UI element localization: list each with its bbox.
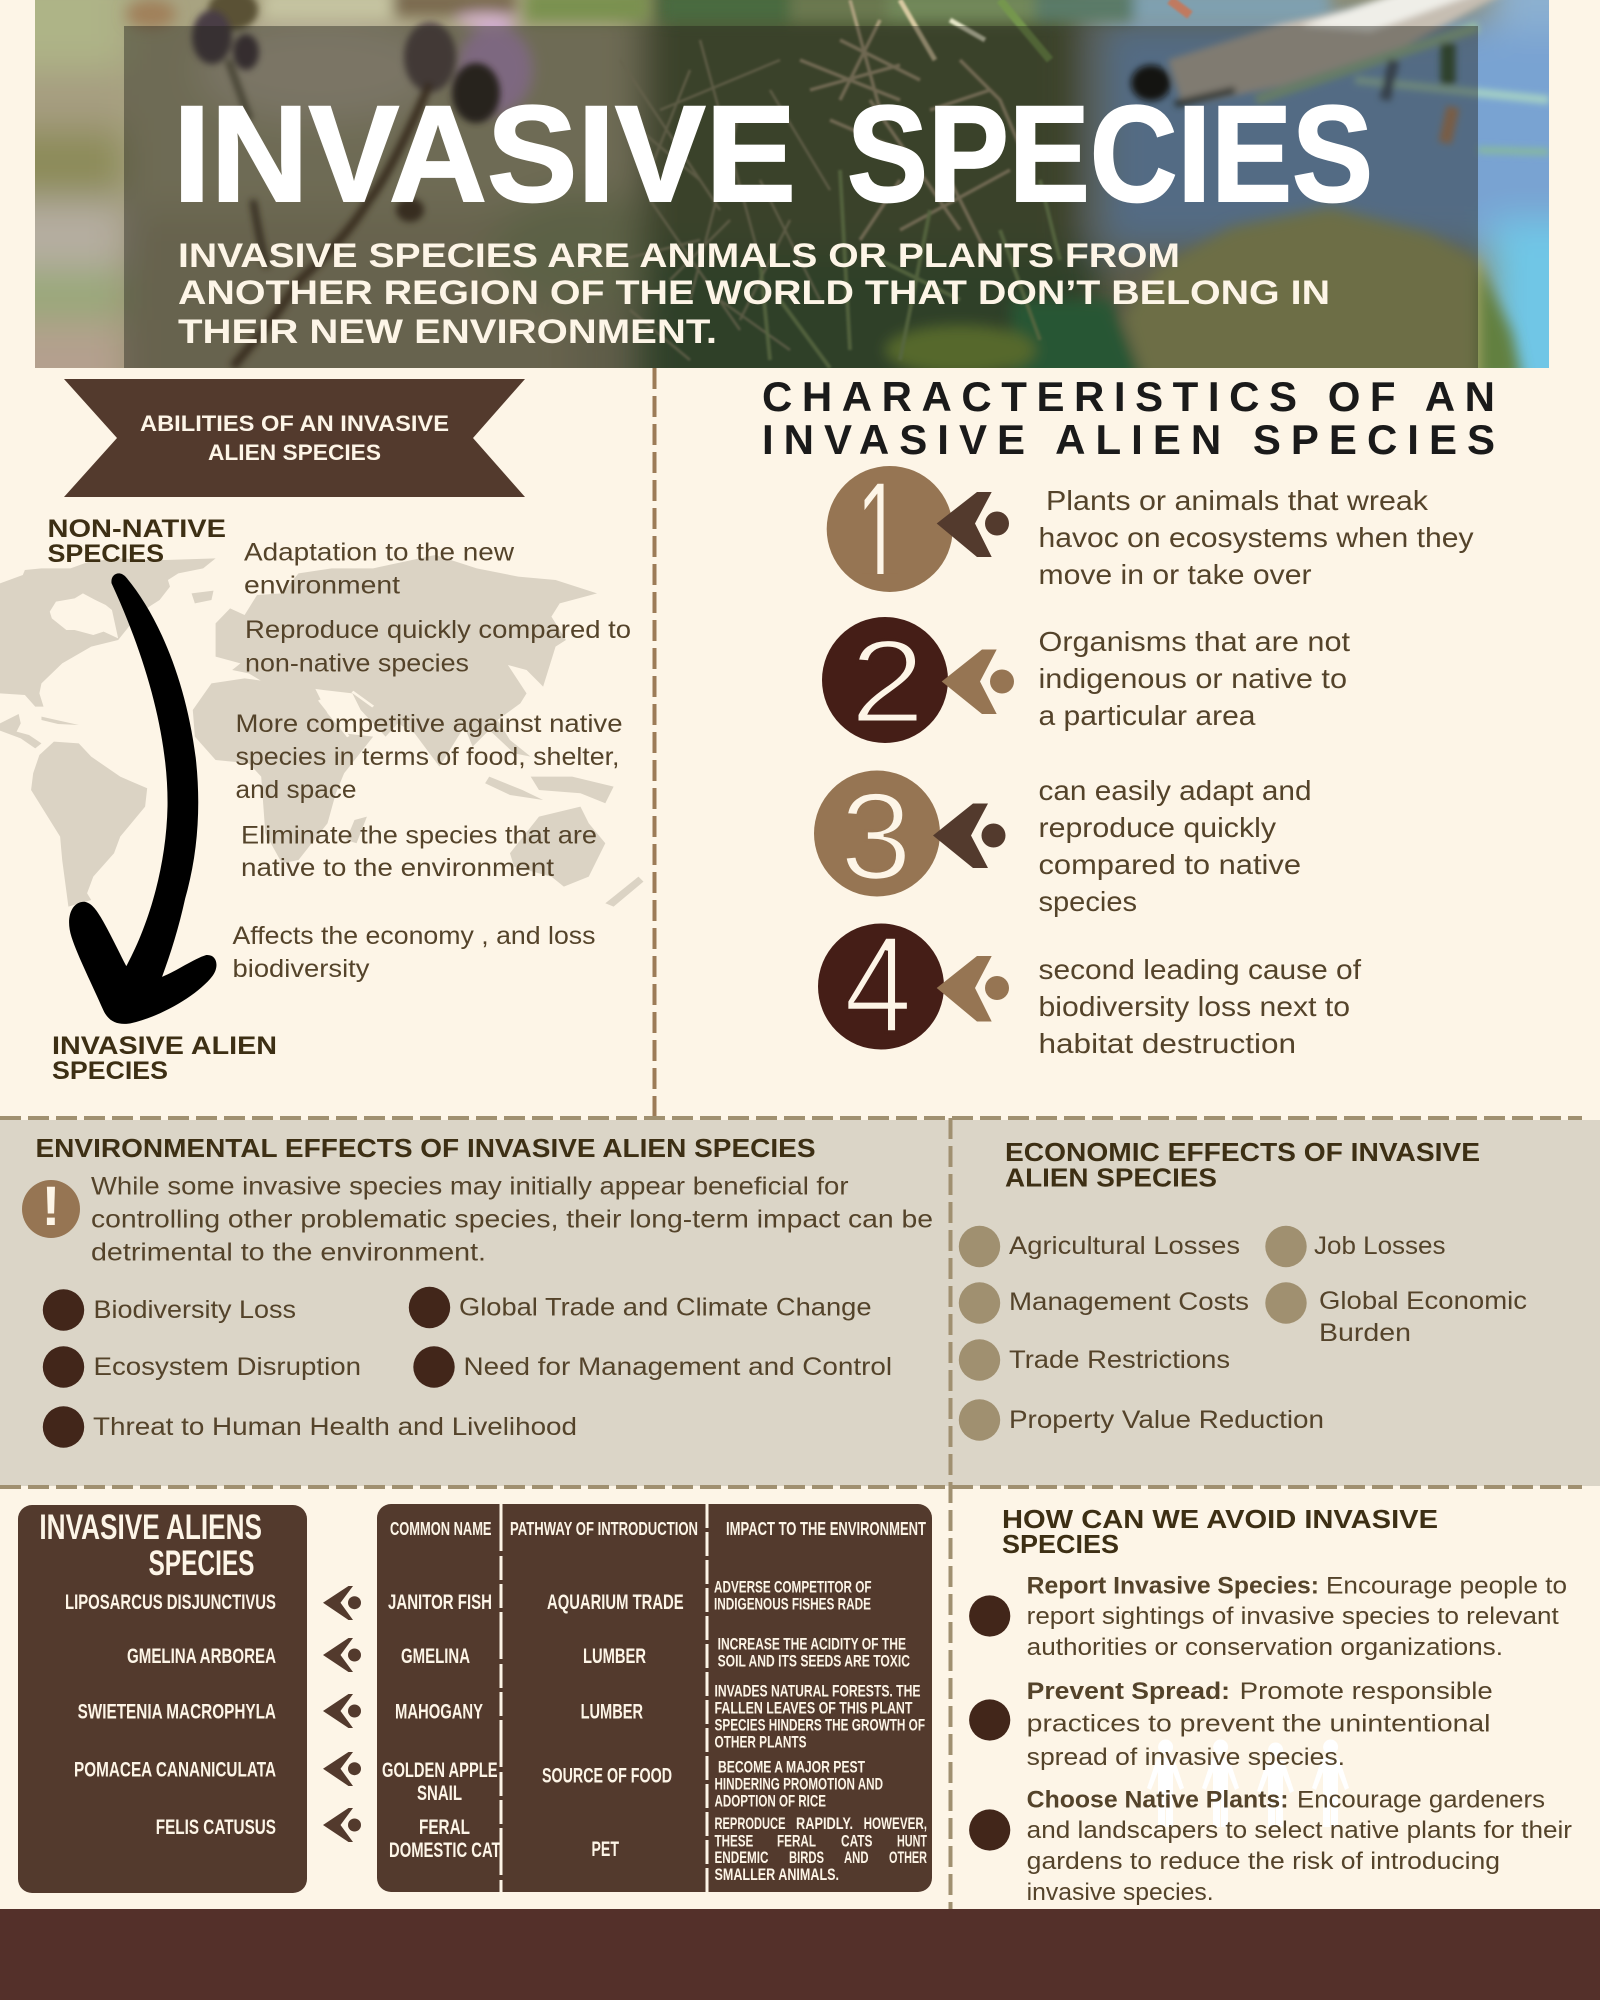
panel: how can we avoid invasive species [969,1504,1572,1906]
item 2 text [1038,626,1350,731]
text: eliminate: native to the environment [241,854,554,882]
heading [1002,1504,1438,1559]
table header: PATHWAY OF INTRODUCTION [510,1519,698,1539]
arrow icons between list and table [323,1586,361,1842]
tip: prevent spread: practices to prevent the unintentional [1027,1711,1490,1738]
text: eliminate: Eliminate the species that are [241,822,597,850]
bullet: job losses [1265,1226,1446,1267]
tip: prevent spread: Prevent Spread: [1027,1678,1230,1705]
heading: INVASIVE ALIEN SPECIES [762,416,1495,463]
decorative people silhouettes [1147,1740,1349,1827]
item 4 text: habitat destruction [1038,1028,1296,1059]
text: competitive: and space [236,776,356,804]
panel: species table [377,1504,932,1892]
column: common name: FERAL [419,1816,470,1839]
title: INVASIVE [173,78,796,231]
item 4 badge [818,908,1009,1062]
column: impact [714,1579,927,1884]
text: reproduce: Reproduce quickly compared to [245,616,631,644]
bullet: global economic burden: Burden [1319,1319,1411,1347]
item 1 text: Plants or animals that wreak [1046,485,1429,516]
column: common name: GMELINA [401,1645,470,1668]
tip: choose native plants: gardens to reduce the risk of introducing [1027,1848,1500,1875]
heading: SPECIES [1002,1529,1119,1559]
item 4 text [1038,954,1361,1059]
item 1 badge [826,466,1009,592]
column: impact: SMALLER ANIMALS. [714,1866,839,1884]
item 4 badge: 4 [844,908,912,1062]
heading [1005,1137,1480,1192]
column: common name: JANITOR FISH [388,1591,492,1614]
icon: exclamation [22,1174,80,1238]
bullet: ecosystem disruption [43,1346,361,1388]
subtitle text block: ANOTHER REGION OF THE WORLD THAT DON’T BELONG IN [178,274,1330,312]
item 1 text: move in or take over [1038,559,1312,590]
bullet: trade restrictions [959,1339,1230,1381]
panel: economic effects [959,1137,1527,1441]
item 1 text: havoc on ecosystems when they [1038,522,1474,553]
column: impact: ADOPTION OF RICE [714,1793,826,1811]
tip: prevent spread: spread of invasive species. [1027,1744,1345,1771]
column: impact: OTHER [889,1849,927,1867]
bullet: biodiversity loss: Biodiversity Loss [94,1296,296,1324]
tip: choose native plants: Choose Native Plants: [1027,1787,1288,1814]
tip: report invasive species: Report Invasive Species: [1027,1573,1319,1600]
bullet: human health: Threat to Human Health and Livelihood [93,1413,577,1441]
subtitle text block [178,237,1330,351]
item 3 text [1038,775,1312,917]
bullet: global trade [409,1287,872,1328]
panel: abilities of an invasive alien species [48,379,631,1085]
arrow: non-native to invasive [69,573,216,1024]
tip: choose native plants: Encourage gardeners [1297,1787,1545,1814]
bullet: management and control [413,1346,892,1388]
panel: characteristics of an invasive alien species [762,373,1495,1062]
bullet: trade restrictions: Trade Restrictions [1009,1346,1230,1374]
scientific names: GMELINA ARBOREA [127,1645,276,1668]
intro paragraph: detrimental to the environment. [91,1238,486,1266]
column: pathway: LUMBER [583,1645,646,1668]
scientific names [65,1591,276,1839]
text: competitive [236,710,622,804]
tip: report invasive species: authorities or conservation organizations. [1027,1634,1503,1661]
scientific names: FELIS CATUSUS [156,1816,276,1839]
column: impact: REPRODUCE [714,1815,786,1833]
tip: choose native plants: and landscapers to select native plants for their [1027,1817,1572,1844]
column: impact: HOWEVER, [864,1815,927,1833]
item 3 text: species [1038,886,1137,917]
label: non-native species: NON-NATIVE [48,515,226,543]
list heading: SPECIES [148,1544,254,1583]
ribbon heading [64,379,525,497]
bottom footer band [0,1909,1600,2000]
intro paragraph: While some invasive species may initially appear beneficial for [91,1172,848,1200]
column: impact: INVADES NATURAL FORESTS. THE [714,1683,920,1701]
tip: report invasive species: report sightings of invasive species to relevant [1027,1603,1559,1630]
label: non-native species [48,515,226,568]
column: impact: SOIL AND ITS SEEDS ARE TOXIC [718,1653,910,1671]
bullet: human health [43,1406,577,1448]
column: impact: ADVERSE COMPETITOR OF [714,1579,872,1597]
table header: IMPACT TO THE ENVIRONMENT [726,1519,926,1539]
dark overlay panel [124,26,1478,368]
text: competitive: species in terms of food, shelter, [236,743,620,771]
table header [390,1519,926,1539]
column: impact: OTHER PLANTS [714,1734,806,1752]
item 3 badge: 3 [840,768,912,906]
bullet: global economic burden: Global Economic [1319,1287,1527,1315]
item 2 text: Organisms that are not [1038,626,1350,657]
column: impact: FERAL [777,1832,816,1850]
column: impact: BECOME A MAJOR PEST [718,1759,865,1777]
item 3 text: can easily adapt and [1038,775,1312,806]
subtitle text block: THEIR NEW ENVIRONMENT. [178,313,717,351]
text: reproduce: non-native species [245,650,469,678]
panel: environmental effects [22,1133,933,1448]
label: invasive alien species: SPECIES [52,1057,168,1085]
item 4 text: biodiversity loss next to [1038,991,1350,1022]
item 2 badge: 2 [850,616,925,748]
icon: exclamation: ! [42,1174,60,1237]
header photo banner [35,0,1549,368]
label: invasive alien species [52,1032,277,1085]
tip: prevent spread: Promote responsible [1240,1678,1493,1705]
ribbon heading: ABILITIES OF AN INVASIVE [140,411,449,436]
tip: choose native plants [969,1787,1572,1906]
column: common name: DOMESTIC CAT [389,1839,501,1862]
heading: ENVIRONMENTAL EFFECTS OF INVASIVE ALIEN SPECIES [36,1133,816,1163]
list heading [39,1508,262,1583]
column: impact: HUNT [897,1832,927,1850]
ribbon heading: ALIEN SPECIES [208,440,381,465]
text: adaptation: Adaptation to the new [244,538,515,566]
panel: species list [18,1505,307,1893]
intro paragraph [91,1172,933,1266]
text: reproduce [245,616,631,678]
bullet: ecosystem disruption: Ecosystem Disruption [94,1353,361,1381]
item 2 text: indigenous or native to [1038,663,1347,694]
item 3 text: compared to native [1038,849,1301,880]
heading [762,373,1495,463]
column: pathway [542,1591,684,1861]
column: impact: SPECIES HINDERS THE GROWTH OF [714,1717,925,1735]
heading: ALIEN SPECIES [1005,1162,1217,1192]
column: impact: THESE [714,1832,753,1850]
beige effects band [0,1120,1600,1486]
scientific names: SWIETENIA MACROPHYLA [78,1701,276,1724]
list heading: INVASIVE ALIENS [39,1508,262,1547]
tip: prevent spread [969,1678,1493,1771]
column: pathway: LUMBER [581,1701,643,1724]
text: economy: biodiversity [232,955,370,983]
text: competitive: More competitive against native [236,710,622,738]
bullet: global trade: Global Trade and Climate Change [459,1294,872,1322]
bullet: management costs: Management Costs [1009,1288,1249,1316]
column: common name: GOLDEN APPLE [382,1759,498,1782]
item 2 text: a particular area [1038,700,1256,731]
world map background [0,555,643,907]
table header: COMMON NAME [390,1519,492,1539]
column: impact: CATS [841,1832,872,1850]
column: impact: BIRDS [789,1849,824,1867]
tip: report invasive species: Encourage people to [1326,1573,1567,1600]
bullet: global economic burden [1265,1282,1527,1347]
bullet: agricultural losses: Agricultural Losses [1009,1232,1240,1260]
column: impact: RAPIDLY. [796,1815,853,1833]
column: pathway: AQUARIUM TRADE [547,1591,684,1614]
text: economy [232,922,596,983]
heading: ECONOMIC EFFECTS OF INVASIVE [1005,1137,1480,1167]
title: SPECIES [847,78,1373,231]
column: impact: HINDERING PROMOTION AND [714,1776,883,1794]
bullet: management costs [959,1282,1249,1324]
item 3 text: reproduce quickly [1038,812,1276,843]
heading: CHARACTERISTICS OF AN [762,373,1495,420]
label: non-native species: SPECIES [48,540,164,568]
bullet: job losses: Job Losses [1314,1232,1446,1260]
column: impact: INCREASE THE ACIDITY OF THE [718,1636,906,1654]
item 1 text [1038,485,1474,590]
bullet: property value reduction [959,1399,1324,1441]
intro paragraph: controlling other problematic species, their long-term impact can be [91,1206,933,1234]
label: invasive alien species: INVASIVE ALIEN [52,1032,277,1060]
tip: choose native plants: invasive species. [1027,1879,1214,1906]
column: common name [382,1591,501,1862]
bullet: agricultural losses [959,1226,1240,1267]
column: pathway: PET [592,1838,619,1861]
subtitle text block: INVASIVE SPECIES ARE ANIMALS OR PLANTS FROM [178,237,1180,275]
text: eliminate [241,822,597,882]
tip: report invasive species [969,1573,1567,1661]
column: impact: AND [844,1849,869,1867]
item 1 badge: 1 [856,450,902,618]
bullet: management and control: Need for Management and Control [464,1353,892,1381]
text: adaptation [244,538,515,600]
title [173,78,1373,231]
bullet: property value reduction: Property Value Reduction [1009,1406,1324,1434]
bullet: biodiversity loss [43,1289,296,1331]
item 3 badge [814,768,1006,906]
column: pathway: SOURCE OF FOOD [542,1765,672,1788]
column: impact: ENDEMIC [714,1849,769,1867]
column: impact: INDIGENOUS FISHES RADE [714,1596,871,1614]
item 2 badge [822,616,1014,748]
heading: HOW CAN WE AVOID INVASIVE [1002,1504,1438,1534]
column: common name: SNAIL [417,1782,462,1805]
column: impact: FALLEN LEAVES OF THIS PLANT [714,1700,912,1718]
item 4 text: second leading cause of [1038,954,1361,985]
column: common name: MAHOGANY [395,1701,483,1724]
scientific names: LIPOSARCUS DISJUNCTIVUS [65,1591,276,1614]
text: economy: Affects the economy , and loss [232,922,596,950]
scientific names: POMACEA CANANICULATA [74,1759,276,1782]
text: adaptation: environment [244,572,400,600]
